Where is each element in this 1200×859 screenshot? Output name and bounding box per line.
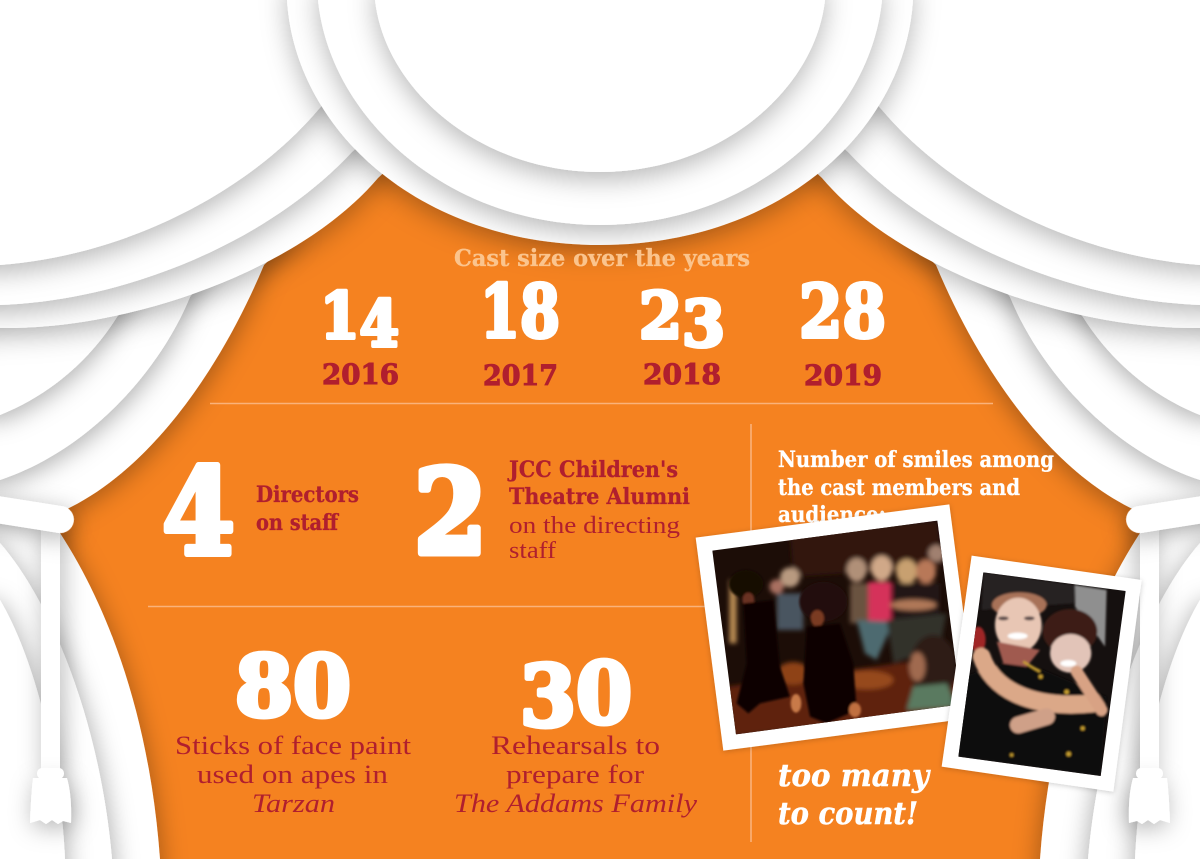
dividers xyxy=(148,404,993,842)
text: number of smiles xyxy=(778,447,1054,528)
stat: 2017 cast of 18 xyxy=(480,269,560,392)
stat: 2 alumni: Theatre Alumni xyxy=(509,484,690,510)
text: number of smiles: audience: xyxy=(778,502,886,528)
stat: 30 rehearsals: prepare for xyxy=(506,760,644,789)
stat: 2019 cast of 28 xyxy=(799,269,886,392)
stat: 2 alumni xyxy=(414,445,690,581)
text: too many to count: too many xyxy=(778,758,931,794)
section: cast size over the years xyxy=(320,245,886,392)
stat: 80 sticks of face paint xyxy=(175,637,412,818)
stat: 2017 cast of 18: 18 xyxy=(480,269,560,355)
stat: 30 rehearsals: Rehearsals to xyxy=(491,731,660,760)
stat: 80 sticks of face paint: used on apes in xyxy=(197,760,388,789)
text: number of smiles: Number of smiles among xyxy=(778,447,1054,473)
stat: 30 rehearsals: The Addams Family xyxy=(454,789,698,818)
stat: 2 alumni: staff xyxy=(509,538,556,564)
stat: 4 directors: Directors xyxy=(256,482,359,508)
stat: 2019 cast of 28: 2019 xyxy=(804,359,882,392)
stat: 2 alumni: 2 xyxy=(414,445,487,581)
stat: 2017 cast of 18: 2017 xyxy=(483,359,558,392)
photo: dancers and audience xyxy=(696,504,977,751)
curtain: left drape xyxy=(0,0,450,859)
stat: 2016 cast of 14: 14 xyxy=(320,279,399,362)
curtain: centre valance xyxy=(287,0,913,245)
stat: 2016 cast of 14: 2016 xyxy=(322,358,399,391)
stat: 2 alumni: on the directing xyxy=(509,513,680,539)
text: too many to count: to count! xyxy=(778,796,918,832)
photo: two smiling cast members xyxy=(942,556,1142,792)
stat: 4 directors: 4 xyxy=(162,442,235,583)
stat: 4 directors: on staff xyxy=(256,510,340,536)
stat: 80 sticks of face paint: Tarzan xyxy=(252,789,335,818)
stat: 80 sticks of face paint: 80 xyxy=(235,637,351,736)
stat: 4 directors xyxy=(162,442,359,583)
stat: 80 sticks of face paint: Sticks of face paint xyxy=(175,731,412,760)
curtain: right drape xyxy=(750,0,1200,859)
text: too many to count xyxy=(778,758,931,832)
stat: 2019 cast of 28: 28 xyxy=(799,269,886,355)
stat: 2 alumni: JCC Children's xyxy=(507,457,678,483)
stat: 2018 cast of 23: 23 xyxy=(639,279,725,362)
text: number of smiles: the cast members and xyxy=(778,475,1020,501)
stat: 30 rehearsals xyxy=(454,644,698,818)
heading: cast size: Cast size over the years xyxy=(454,245,750,272)
stat: 30 rehearsals: 30 xyxy=(520,644,632,746)
stat: 2018 cast of 23: 2018 xyxy=(643,358,721,391)
